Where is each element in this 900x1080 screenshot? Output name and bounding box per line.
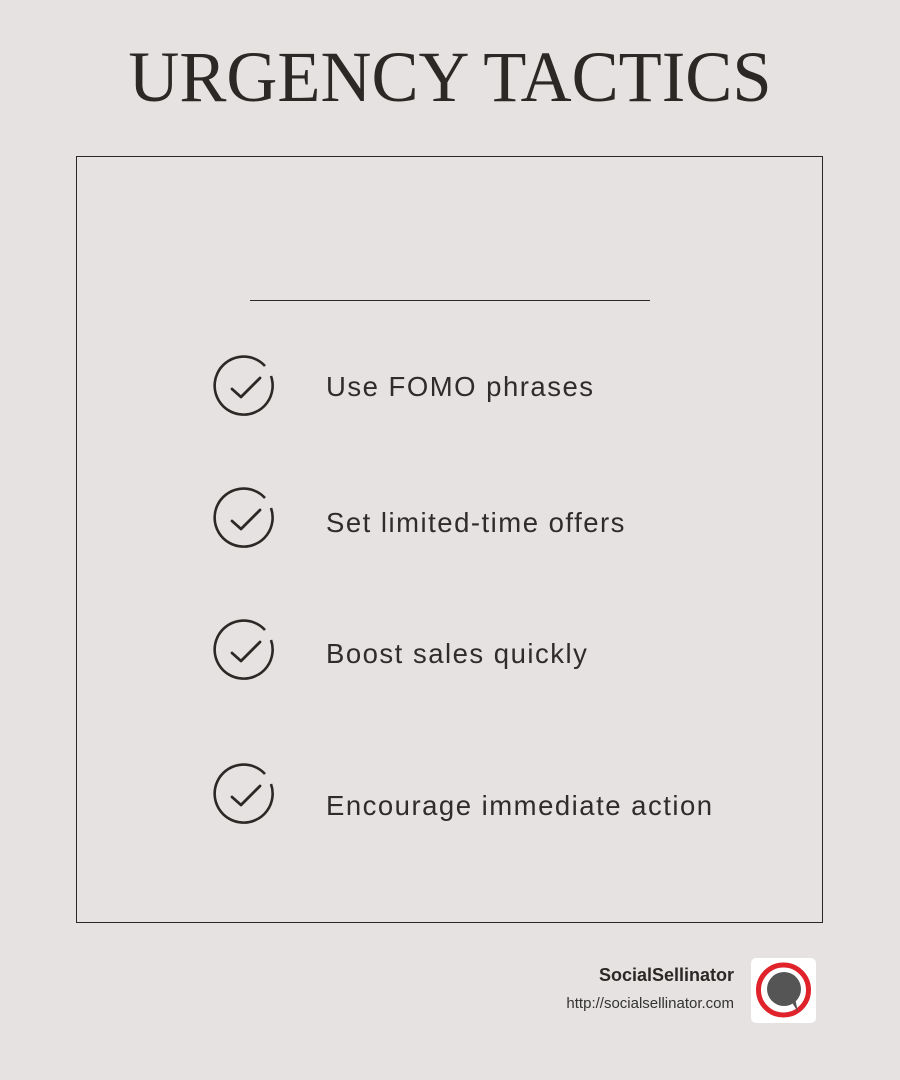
panel: tactics bbox=[76, 156, 823, 923]
footer brand: SocialSellinator bbox=[599, 965, 734, 985]
item 3: Boost sales quickly bbox=[326, 638, 588, 669]
item 4 bbox=[213, 763, 714, 824]
title: URGENCY TACTICS bbox=[128, 37, 772, 117]
item 1: Use FOMO phrases bbox=[326, 371, 595, 402]
item 1 bbox=[213, 355, 595, 416]
item 2 bbox=[213, 487, 626, 548]
icon: logo bbox=[751, 958, 816, 1023]
item 2: Set limited-time offers bbox=[326, 507, 626, 538]
item 3 bbox=[213, 619, 588, 680]
footer brand: http://socialsellinator.com bbox=[566, 995, 734, 1012]
footer brand bbox=[566, 965, 734, 1012]
item 4: Encourage immediate action bbox=[326, 790, 714, 821]
